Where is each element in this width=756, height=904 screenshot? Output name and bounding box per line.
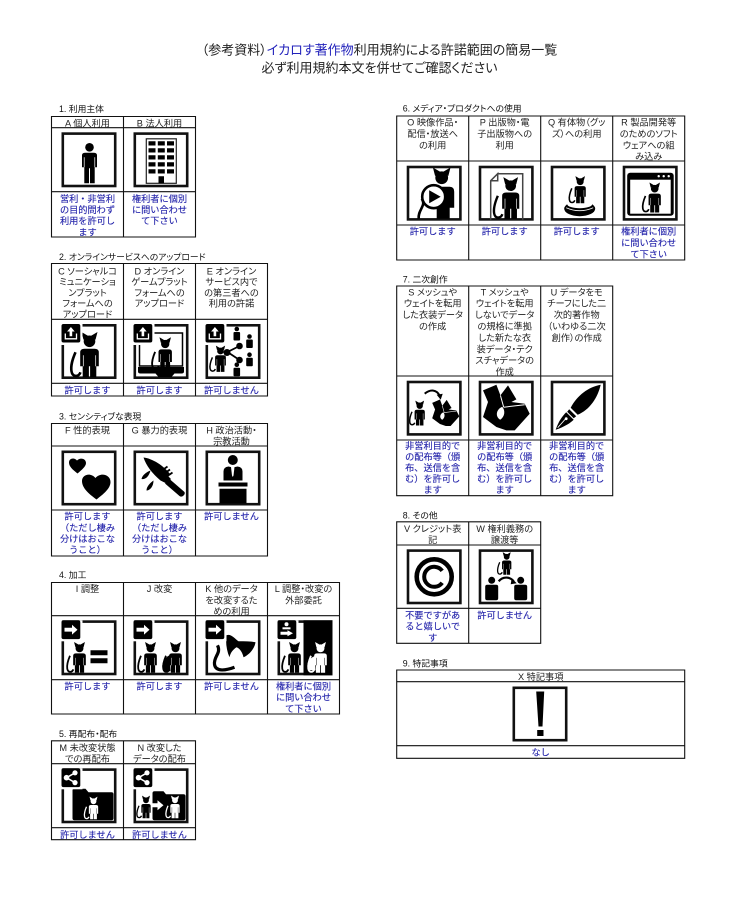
column B verdict: に問い合わせ xyxy=(132,204,187,215)
column U verdict: ます xyxy=(568,485,586,495)
column S label: した衣装データ xyxy=(402,309,464,320)
icon: upload to social platform xyxy=(62,324,115,378)
column L label: 外部委託 xyxy=(285,594,322,605)
column U verdict: 非営利目的で xyxy=(549,440,604,451)
column Q label: Q 有体物（グッ xyxy=(548,116,605,128)
column C verdict: 許可します xyxy=(65,384,110,396)
column G verdict: 分けはおこな xyxy=(132,534,187,544)
icon: office building xyxy=(135,134,187,186)
column B verdict: 権利者に個別 xyxy=(132,193,187,204)
column U label: （いわゆる二次 xyxy=(548,320,606,332)
column L label: L 調整・改変の xyxy=(275,583,332,594)
column U label: 次的著作物 xyxy=(554,309,600,320)
icon: share folder xyxy=(62,768,115,822)
icon: bloody knife xyxy=(135,452,187,504)
panel: 5 再配布・配布 xyxy=(52,728,196,840)
column R verdict: て下さい xyxy=(630,250,667,260)
column J verdict: 許可します xyxy=(137,680,182,691)
heading: 1: 1. 利用主体 xyxy=(59,103,104,114)
column O label: の利用 xyxy=(419,139,446,150)
column W label: W 権利義務の xyxy=(476,523,533,534)
panel: 8 その他 xyxy=(397,510,541,643)
title: 必ず利用規約本文を併せてご確認ください xyxy=(262,60,497,76)
column V verdict: ると嬉しいで xyxy=(405,621,460,632)
column G label: G 暴力的表現 xyxy=(132,424,187,436)
column W label: 譲渡等 xyxy=(491,534,518,545)
column S verdict: 布、送信を含 xyxy=(405,462,460,473)
heading: 5: 5. 再配布・配布 xyxy=(59,728,117,739)
column U verdict: の配布等（頒 xyxy=(549,451,604,462)
column A verdict: の目的問わず xyxy=(60,204,115,215)
column R label: のためのソフト xyxy=(620,129,678,139)
icon: speaker at podium xyxy=(207,452,259,504)
column K label: を改変するた xyxy=(205,594,258,605)
icon: software window xyxy=(624,167,676,219)
column S verdict: の配布等（頒 xyxy=(405,451,460,462)
heading: 8: 8. その他 xyxy=(403,510,438,520)
column G verdict: （ただし棲み xyxy=(132,522,187,533)
title xyxy=(202,42,557,76)
icon: person xyxy=(63,134,115,186)
column T verdict: の配布等（頒 xyxy=(477,451,532,462)
column G verdict: うこと） xyxy=(141,545,178,555)
column H label: H 政治活動・ xyxy=(206,424,257,436)
column K label: めの利用 xyxy=(213,606,250,617)
column R label: ウェアへの組 xyxy=(623,139,675,150)
column S label: の作成 xyxy=(419,320,446,332)
heading: 9: 9. 特記事項 xyxy=(403,658,448,668)
panel: 7 二次創作 xyxy=(397,274,613,496)
column U label: チーフにした二 xyxy=(547,299,606,309)
column S label: ウェイトを転用 xyxy=(404,299,462,309)
column X verdict: なし xyxy=(532,748,550,758)
icon: copyright mark xyxy=(408,551,460,603)
column Q label: ズ）への利用 xyxy=(552,128,602,139)
column T verdict: 布、送信を含 xyxy=(477,462,532,473)
column W verdict: 許可しません xyxy=(477,610,532,620)
column R verdict: 権利者に個別 xyxy=(621,226,676,236)
column B verdict: て下さい xyxy=(141,216,178,226)
panel: 6 メディア・プロダクトへの使用 xyxy=(397,102,685,260)
column A verdict: ます xyxy=(78,227,97,237)
column F label: F 性的表現 xyxy=(65,424,110,436)
column E label: E オンライン xyxy=(207,266,257,276)
icon: costume xyxy=(480,382,532,434)
icon: hearts xyxy=(63,452,115,504)
column T label: 装データ・テク xyxy=(477,343,533,354)
heading: 3: 3. センシティブな表現 xyxy=(59,410,142,422)
column T label: した新たな衣 xyxy=(478,332,531,343)
panel: 1 利用主体 xyxy=(52,103,196,237)
column N label: N 改変した xyxy=(137,742,182,753)
column E label: サービス内で xyxy=(205,276,258,287)
column F verdict: 許可します xyxy=(65,511,110,522)
icon: video play xyxy=(408,167,460,219)
column M verdict: 許可しません xyxy=(60,829,115,840)
column A verdict: 利用を許可し xyxy=(60,215,115,226)
icon: outsourcing xyxy=(278,620,332,675)
column Q verdict: 許可します xyxy=(554,226,600,236)
column T verdict: む）を許可し xyxy=(477,473,532,484)
column R verdict: に問い合わせ xyxy=(621,237,676,248)
column V verdict: す xyxy=(428,633,437,643)
column D label: D オンライン xyxy=(134,266,185,276)
column D label: ゲームプラット xyxy=(131,276,188,287)
column O verdict: 許可します xyxy=(410,226,456,236)
icon: publication xyxy=(480,167,532,220)
column A label: A 個人利用 xyxy=(65,117,110,128)
icon: transfer of rights xyxy=(480,551,532,603)
column I label: I 調整 xyxy=(76,583,99,594)
column D verdict: 許可します xyxy=(137,384,182,396)
icon: modify, two cats xyxy=(134,620,187,674)
title: （参考資料）イカロす著作物利用規約による許諾範囲の簡易一覧 xyxy=(202,42,557,58)
column T label: の規格に準拠 xyxy=(477,320,532,332)
column F verdict: 分けはおこな xyxy=(60,534,115,544)
icon: using parts, bow and tail xyxy=(206,620,259,674)
column T label: 作成 xyxy=(496,366,514,377)
column C label: C ソーシャルコ xyxy=(58,266,117,276)
column I verdict: 許可します xyxy=(65,680,110,691)
heading: 6: 6. メディア・プロダクトへの使用 xyxy=(403,102,522,114)
panel: 4 加工 xyxy=(52,570,340,714)
column T label: T メッシュや xyxy=(481,287,529,297)
icon: exclamation mark xyxy=(514,688,566,740)
column E label: の第三者への xyxy=(204,287,259,298)
icon: figure on a base xyxy=(552,167,604,219)
icon: adjust, equals xyxy=(62,620,115,674)
column B label: B 法人利用 xyxy=(137,117,182,128)
column C label: ンプラット xyxy=(68,288,107,298)
column P verdict: 許可します xyxy=(482,226,528,236)
column M label: M 未改変状態 xyxy=(59,742,116,753)
column N label: データの配布 xyxy=(133,753,186,764)
heading: 2: 2. オンラインサービスへのアップロード xyxy=(59,252,206,262)
column L verdict: に問い合わせ xyxy=(276,692,331,703)
column R label: み込み xyxy=(635,152,662,162)
column J label: J 改変 xyxy=(147,583,172,594)
column O label: 配信・放送へ xyxy=(407,128,458,139)
column U verdict: 布、送信を含 xyxy=(549,462,604,473)
panel: 2 オンラインサービスへのアップロード xyxy=(52,252,268,396)
column L verdict: て下さい xyxy=(285,704,322,714)
column S label: S メッシュや xyxy=(408,287,457,297)
column H label: 宗教活動 xyxy=(213,436,250,447)
column U verdict: む）を許可し xyxy=(549,473,604,484)
panel: 9 特記事項 xyxy=(397,658,685,758)
column M label: での再配布 xyxy=(65,753,110,764)
column P label: 利用 xyxy=(496,139,514,150)
column D label: フォームへの xyxy=(134,288,185,298)
column D label: アップロード xyxy=(135,299,184,309)
column F verdict: うこと） xyxy=(69,545,106,555)
column O label: O 映像作品・ xyxy=(407,116,458,128)
column T label: スチャデータの xyxy=(475,355,534,366)
column T verdict: ます xyxy=(496,485,514,495)
column S verdict: ます xyxy=(424,485,442,495)
column R label: R 製品開発等 xyxy=(621,116,676,128)
column V verdict: 不要ですがあ xyxy=(405,610,460,620)
column K label: K 他のデータ xyxy=(205,583,258,594)
column P label: 子出版物への xyxy=(477,128,532,139)
column T label: しないでデータ xyxy=(475,309,535,320)
column T verdict: 非営利目的で xyxy=(477,440,532,451)
column U label: U データをモ xyxy=(551,286,603,297)
icon: share modified data xyxy=(134,768,187,822)
column V label: V クレジット表 xyxy=(404,524,461,534)
column S verdict: む）を許可し xyxy=(405,473,460,484)
icon: third party licensing xyxy=(206,324,259,378)
column F verdict: （ただし棲み xyxy=(60,522,115,533)
column C label: フォームへの xyxy=(62,299,113,309)
column A verdict: 営利・非営利 xyxy=(60,193,115,204)
column X label: X 特記事項 xyxy=(518,671,563,682)
column C label: アップロード xyxy=(63,310,112,320)
column K verdict: 許可しません xyxy=(204,680,259,691)
icon: pen nib xyxy=(552,382,604,434)
icon: costume from mesh xyxy=(408,382,460,434)
column C label: ミュニケーショ xyxy=(59,277,116,287)
column T label: ウェイトを転用 xyxy=(476,299,534,309)
column P label: P 出版物・電 xyxy=(480,116,530,128)
column S verdict: 非営利目的で xyxy=(405,440,460,451)
column V label: 記 xyxy=(428,535,437,545)
heading: 4: 4. 加工 xyxy=(59,570,87,580)
column G verdict: 許可します xyxy=(137,511,182,522)
panel: 3 センシティブな表現 xyxy=(52,410,268,556)
column E verdict: 許可しません xyxy=(204,384,259,396)
column L verdict: 権利者に個別 xyxy=(276,680,331,691)
column N verdict: 許可しません xyxy=(132,829,187,840)
column H verdict: 許可しません xyxy=(204,511,259,522)
column E label: 利用の許諾 xyxy=(209,298,254,309)
column U label: 創作）の作成 xyxy=(552,332,602,343)
icon: upload to game platform xyxy=(134,324,187,378)
heading: 7: 7. 二次創作 xyxy=(403,274,448,284)
